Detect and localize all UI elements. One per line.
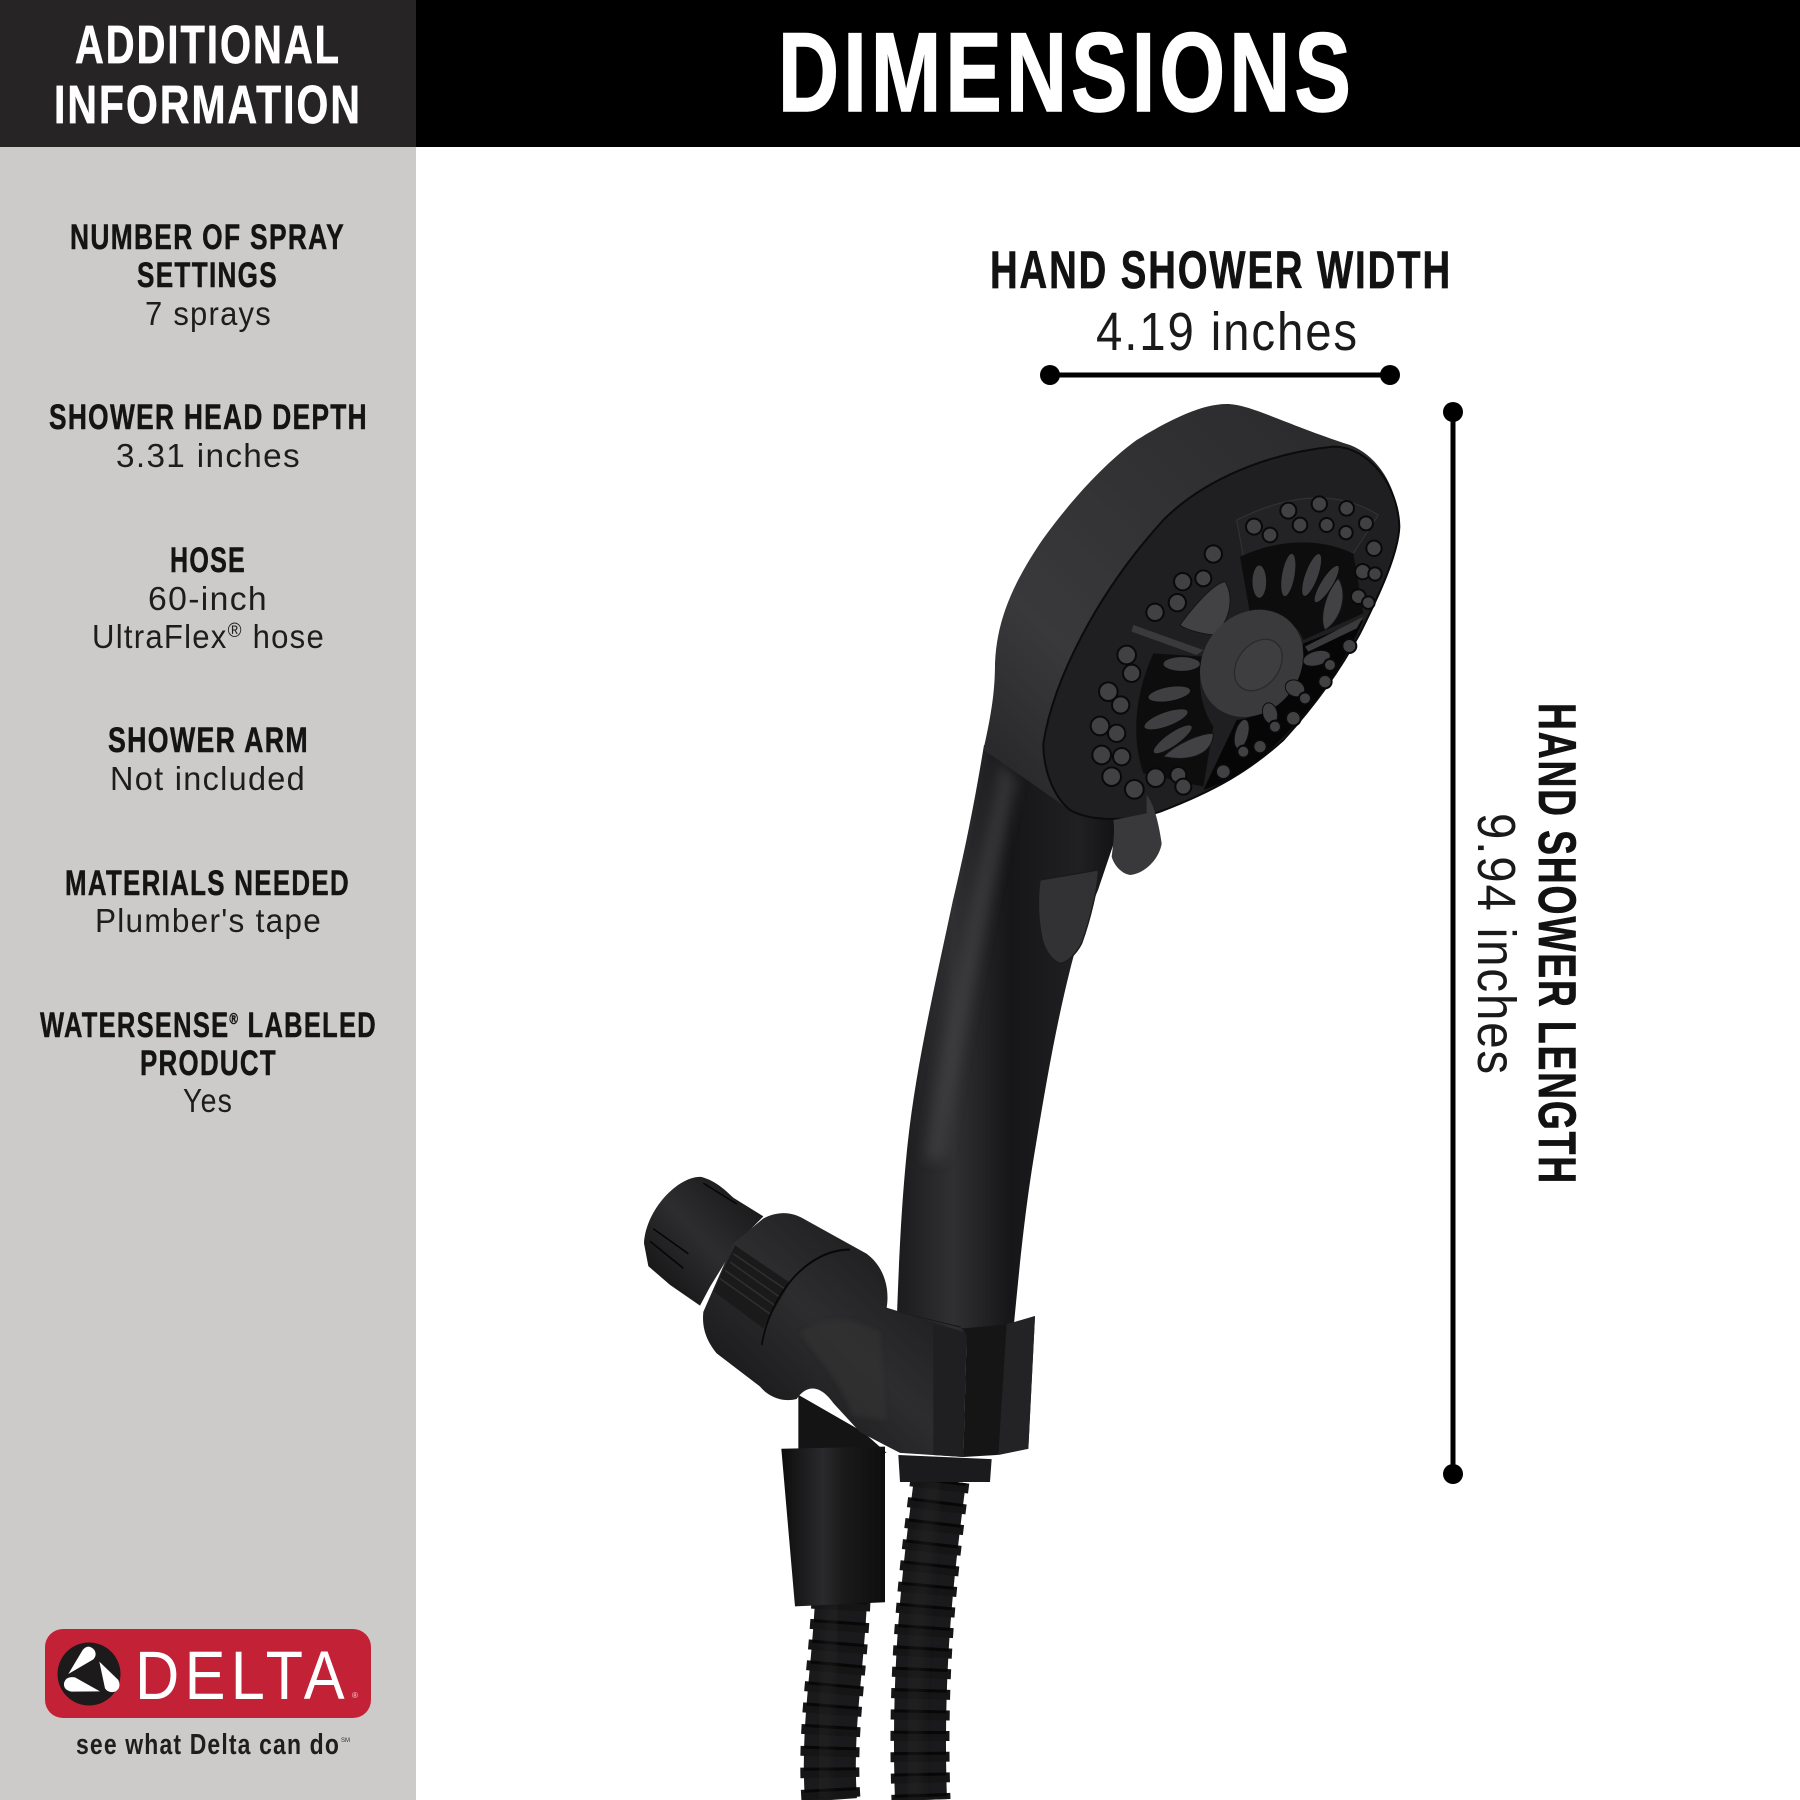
head: spray selector tab bbox=[1112, 795, 1162, 875]
spec: materials needed: MATERIALS NEEDED bbox=[65, 864, 350, 903]
spec: watersense labeled product: ® bbox=[229, 1011, 239, 1028]
head: round spray nozzles bbox=[1091, 496, 1382, 799]
spec: hose: UltraFlex bbox=[92, 618, 236, 655]
sidebar header bbox=[0, 0, 416, 147]
delta logo: SM bbox=[341, 1738, 350, 1744]
head: face plate bbox=[1043, 447, 1399, 819]
width dimension label bbox=[990, 241, 1452, 362]
spec: shower arm: SHOWER ARM bbox=[108, 721, 309, 760]
sidebar header: ADDITIONAL bbox=[75, 15, 341, 75]
hose: left bbox=[823, 1600, 841, 1800]
spec: shower head depth bbox=[49, 398, 368, 474]
mount: ribbed collar and body bbox=[703, 1213, 967, 1457]
spec: watersense labeled product: PRODUCT bbox=[140, 1044, 277, 1083]
product illustration: hand shower bbox=[644, 404, 1399, 1800]
handle: pause button bbox=[1038, 870, 1098, 963]
spec: shower head depth: 3.31 inches bbox=[116, 437, 301, 474]
title banner bbox=[416, 0, 1800, 147]
spec: watersense labeled product: Yes bbox=[183, 1082, 233, 1119]
delta logo: DELTA bbox=[135, 1637, 350, 1714]
mount: lower sleeve and elbow tube bbox=[781, 1395, 887, 1606]
spec: shower arm: Not included bbox=[110, 760, 306, 797]
spec: hose: 60-inch bbox=[148, 580, 268, 617]
mount: threaded knob bbox=[644, 1177, 763, 1306]
mount assembly bbox=[644, 1177, 1035, 1606]
length dimension label: 9.94 inches bbox=[1466, 813, 1526, 1076]
width dimension label: HAND SHOWER WIDTH bbox=[990, 241, 1452, 300]
head: center nozzle disc bbox=[1179, 589, 1325, 738]
shower head bbox=[983, 404, 1399, 963]
spec: hose bbox=[92, 541, 325, 655]
length dimension arrow bbox=[1443, 402, 1463, 1484]
length dimension label: HAND SHOWER LENGTH bbox=[1527, 703, 1586, 1185]
head: oval spray nozzles bbox=[1142, 551, 1343, 758]
length dimension label bbox=[1466, 703, 1586, 1185]
spec: materials needed: Plumber's tape bbox=[95, 902, 322, 939]
spec: watersense labeled product bbox=[40, 1006, 377, 1119]
spec: watersense labeled product: LABELED bbox=[239, 1006, 377, 1045]
spec: number of spray settings: SETTINGS bbox=[137, 256, 278, 295]
width dimension label: 4.19 inches bbox=[1096, 302, 1359, 362]
mount: holder clip bbox=[880, 1308, 1035, 1482]
spec: materials needed bbox=[65, 864, 350, 939]
spec: number of spray settings bbox=[70, 218, 345, 332]
spec: shower arm bbox=[108, 721, 309, 797]
spec: hose: hose bbox=[243, 618, 325, 655]
hose: right bbox=[914, 1480, 940, 1800]
head: spray wedges bbox=[1163, 578, 1343, 758]
sidebar header: INFORMATION bbox=[54, 75, 362, 135]
spec: number of spray settings: 7 sprays bbox=[145, 295, 272, 332]
spec: hose: HOSE bbox=[170, 541, 246, 580]
title banner: DIMENSIONS bbox=[778, 10, 1355, 135]
delta logo bbox=[45, 1629, 371, 1761]
spec: shower head depth: SHOWER HEAD DEPTH bbox=[49, 398, 368, 437]
head: back shell bbox=[983, 404, 1399, 819]
delta logo: ® bbox=[352, 1691, 358, 1700]
delta logo: see what Delta can do bbox=[76, 1729, 340, 1761]
spec: hose: ® bbox=[228, 620, 243, 642]
panel: additional information sidebar bbox=[0, 0, 416, 1800]
width dimension arrow bbox=[1040, 365, 1400, 385]
spec: watersense labeled product: WATERSENSE bbox=[40, 1006, 300, 1045]
spec: number of spray settings: NUMBER OF SPRAY bbox=[70, 218, 345, 257]
handle bbox=[896, 745, 1125, 1345]
